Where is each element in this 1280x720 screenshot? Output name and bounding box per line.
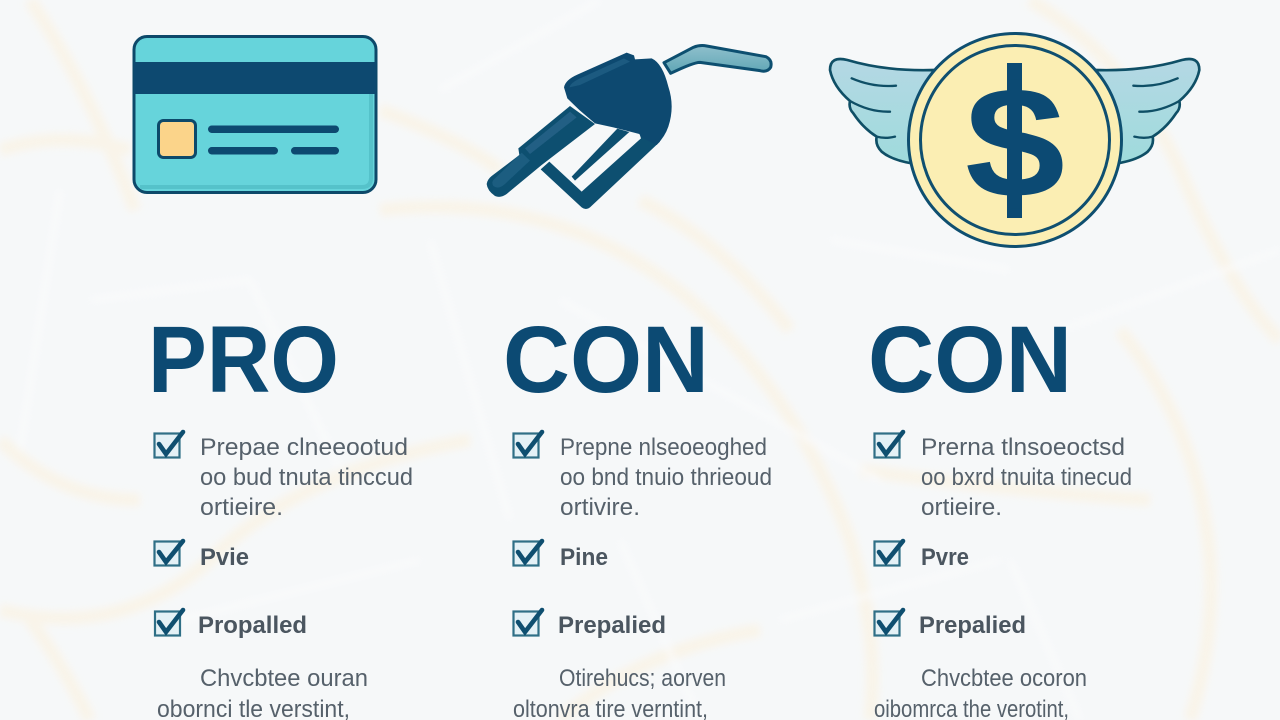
closing text	[157, 665, 368, 720]
panel: column 2 con	[503, 307, 772, 720]
icon: fuel pump nozzle	[487, 46, 771, 209]
heading: CON: CON	[503, 307, 709, 413]
check item 1: oo bxrd tnuita tinecud	[921, 464, 1132, 491]
coin	[908, 34, 1122, 246]
check item 2	[514, 541, 608, 571]
icon: flying dollar coin	[830, 34, 1199, 246]
heading: PRO: PRO	[148, 307, 339, 413]
check item 2: Pine	[560, 544, 608, 571]
check item 1: ortieire.	[921, 494, 1002, 521]
check item 1	[514, 432, 772, 521]
check item 1: ortieire.	[200, 494, 283, 521]
check item 3	[874, 610, 1026, 639]
heading: CON: CON	[868, 307, 1072, 413]
check item 1	[874, 432, 1132, 521]
left wing	[830, 59, 935, 163]
check item 2: Pvre	[921, 544, 969, 571]
check item 1: Prerna tlnsoeoctsd	[921, 434, 1125, 461]
closing text: Chvcbtee ocoron	[921, 665, 1087, 692]
check item 3	[514, 610, 666, 639]
check item 1: Prepae clneeootud	[200, 434, 408, 461]
check item 2	[874, 541, 969, 571]
check item 2: Pvie	[200, 544, 249, 571]
check item 1: oo bud tnuta tinccud	[200, 464, 413, 491]
check item 3: Prepalied	[558, 612, 666, 639]
check item 1	[154, 432, 413, 521]
closing text: Chvcbtee ouran	[200, 665, 368, 692]
closing text	[513, 665, 726, 720]
icon: credit card	[134, 36, 376, 192]
right wing	[1094, 59, 1199, 163]
check item 3: Propalled	[198, 612, 307, 639]
closing text: Otirehucs; aorven	[559, 665, 726, 692]
check item 3	[155, 610, 307, 639]
check item 3: Prepalied	[919, 612, 1026, 639]
check item 1: ortivire.	[560, 494, 640, 521]
coin: $	[965, 55, 1065, 231]
closing text	[874, 665, 1087, 720]
panel: column 1 pro	[148, 307, 413, 720]
check item 2	[154, 541, 249, 571]
check item 1: Prepne nlseoeoghed	[560, 434, 767, 461]
panel: column 3 con	[868, 307, 1132, 720]
check item 1: oo bnd tnuio thrieoud	[560, 464, 772, 491]
